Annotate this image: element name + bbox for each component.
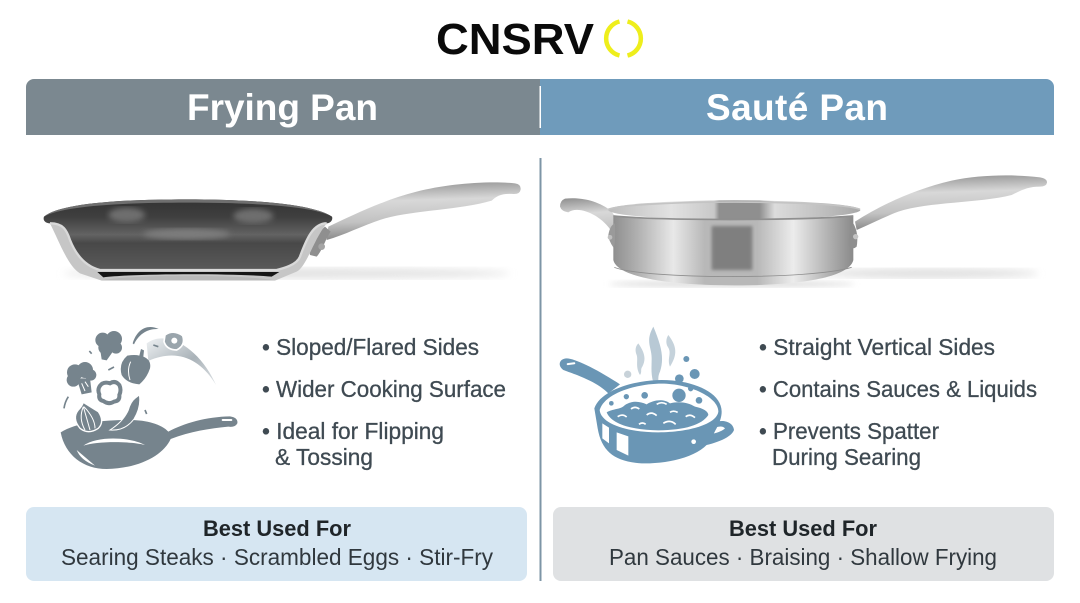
panel heading: Best Used For — [203, 516, 351, 541]
pan body — [594, 380, 722, 463]
pepper ring — [98, 382, 120, 403]
bullet: vertical sides: • Straight Vertical Sides — [759, 334, 995, 360]
bullet continuation: tossing: & Tossing — [275, 444, 373, 470]
bullet continuation: searing: During Searing — [772, 444, 921, 470]
bullet: prevents spatter: • Prevents Spatter — [759, 418, 939, 444]
panel text: Pan Sauces · Braising · Shallow Frying — [609, 544, 997, 570]
bullet: wider surface: • Wider Cooking Surface — [262, 376, 506, 402]
icon: simmering sauté pan — [560, 327, 734, 463]
logo: CNSRV — [436, 15, 641, 64]
panel text: Searing Steaks · Scrambled Eggs · Stir-Fry — [61, 544, 493, 570]
handle — [560, 358, 620, 393]
logo ring — [606, 22, 641, 56]
heading: Frying Pan: Frying Pan — [187, 87, 378, 128]
bullet: sloped sides: • Sloped/Flared Sides — [262, 334, 479, 360]
photo: frying pan — [44, 182, 521, 281]
bullet: flipping: • Ideal for Flipping — [262, 418, 444, 444]
pepper — [121, 349, 150, 384]
header: Sauté Pan — [540, 79, 1054, 135]
chili — [110, 395, 140, 430]
swoosh — [147, 338, 216, 385]
onion — [75, 402, 102, 432]
broccoli left — [67, 362, 96, 394]
heading: Sauté Pan: Sauté Pan — [706, 87, 888, 128]
list: sauté pan features — [759, 334, 1037, 470]
list: frying pan features — [262, 334, 506, 470]
panel: sauté pan best uses — [553, 507, 1054, 581]
header: Frying Pan — [26, 79, 540, 135]
bullet: contains sauces: • Contains Sauces & Liquids — [759, 376, 1037, 402]
logo wordmark: CNSRV — [436, 15, 595, 64]
panel: frying pan best uses — [26, 507, 527, 581]
broccoli top — [95, 331, 122, 360]
panel heading: Best Used For — [729, 516, 877, 541]
pan — [61, 416, 237, 469]
photo: sauté pan — [560, 175, 1047, 287]
bubbles — [683, 356, 689, 362]
steam — [649, 327, 662, 390]
icon: tossing vegetables in frying pan — [61, 327, 237, 469]
